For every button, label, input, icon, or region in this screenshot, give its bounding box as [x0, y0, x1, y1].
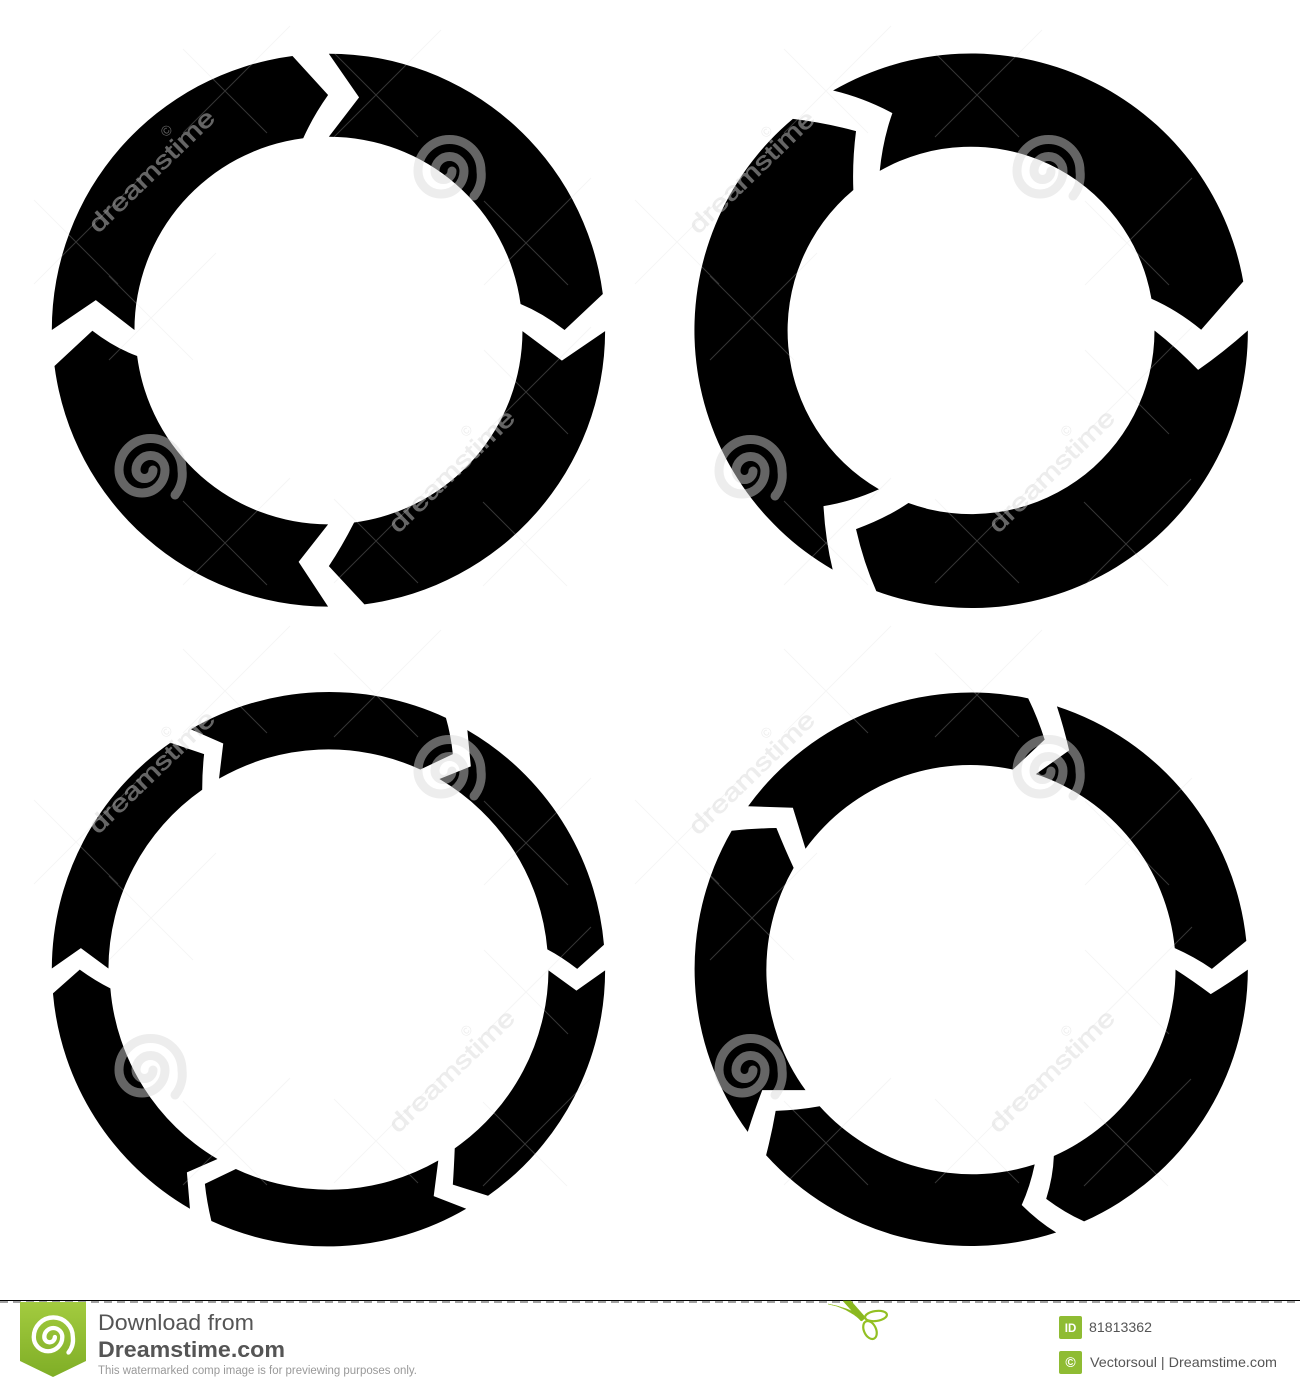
arrow segment: bottom right [856, 330, 1248, 608]
watermark: dreamstime text: © [757, 723, 776, 742]
arrow segment: bottom left [54, 331, 328, 607]
arrow segment: left [695, 828, 806, 1132]
watermark: dreamstime text: dreamstime [683, 706, 821, 840]
watermark: dreamstime text: © [457, 1021, 476, 1040]
arrow segment: top [191, 692, 453, 779]
icon: scissors [828, 1301, 888, 1341]
text: dreamstime.com: Dreamstime.com [98, 1337, 285, 1362]
arrow segment: top right [329, 54, 603, 330]
arrow segment: bottom right [329, 331, 605, 604]
icon: green ribbon with spiral [20, 1302, 86, 1377]
ring: five arrows, bottom right [695, 692, 1248, 1246]
watermark: dreamstime text: dreamstime [83, 104, 221, 238]
text: image id: 81813362 [1089, 1319, 1152, 1335]
ring: six arrows, bottom left [52, 692, 605, 1246]
watermark: dreamstime text: dreamstime [383, 404, 521, 538]
arrow segment: left [694, 119, 879, 570]
watermark: dreamstime text: © [1057, 421, 1076, 440]
arrow segment: top [833, 54, 1243, 330]
watermark: dreamstime text: © [457, 421, 476, 440]
icon: copyright badge [1059, 1351, 1082, 1374]
watermark: dreamstime text: dreamstime [983, 404, 1121, 538]
watermark: thin crosses [34, 26, 1192, 1186]
arrow segment: bottom [766, 1106, 1056, 1246]
arrow segment: lower right [1046, 970, 1248, 1221]
watermark: dreamstime text: © [157, 121, 176, 140]
icon: id badge: ID [1065, 1323, 1076, 1335]
ring: three arrows, top right [694, 54, 1248, 608]
arrow segment: lower right [453, 970, 605, 1196]
arrow segment: upper right [1036, 706, 1246, 969]
arrow segment: top left [52, 56, 328, 330]
arrow segment: lower left [53, 970, 217, 1209]
watermark: dreamstime text: © [157, 722, 176, 741]
watermark: spirals [119, 140, 1080, 1095]
watermark: dreamstime text: dreamstime [683, 105, 821, 239]
arrow segment: upper right [439, 730, 604, 969]
watermark: dreamstime text: © [757, 122, 776, 141]
text: preview disclaimer: This watermarked comp image is for previewing purposes only. [98, 1365, 417, 1377]
watermark: dreamstime text: dreamstime [83, 705, 221, 839]
watermark: dreamstime text: © [1057, 1021, 1076, 1040]
text: download from: Download from [98, 1310, 254, 1335]
icon: id badge [1059, 1316, 1082, 1339]
watermark: dreamstime text: dreamstime [983, 1004, 1121, 1138]
arrow segment: top [748, 692, 1045, 849]
footer background [0, 1300, 1300, 1390]
watermark: dreamstime text: dreamstime [383, 1004, 521, 1138]
icon: copyright badge: © [1065, 1354, 1076, 1370]
arrow segment: bottom [205, 1161, 466, 1246]
text: author credit: Vectorsoul | Dreamstime.com [1090, 1354, 1277, 1370]
ring: four arrows, top left [52, 54, 605, 607]
arrow segment: upper left [52, 743, 204, 968]
watermark: dreamstime text [83, 104, 1121, 1138]
